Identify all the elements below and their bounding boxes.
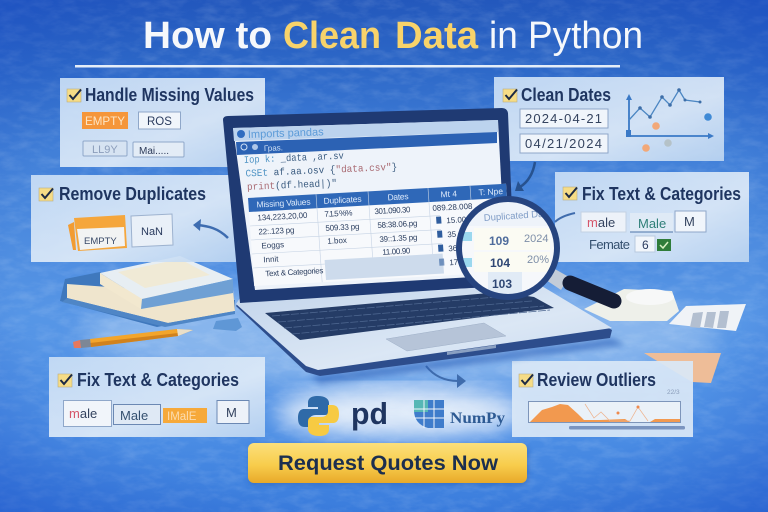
tag: male bbox=[581, 212, 626, 232]
tag: ros: ROS bbox=[147, 116, 172, 128]
toolbar bbox=[236, 132, 497, 155]
code lines: CSEt af.aa.osv {"data.csv"} bbox=[245, 162, 398, 180]
tag: empty: EMPTY bbox=[85, 116, 125, 128]
tag: M: M bbox=[684, 214, 695, 229]
heading: fix text left: Fix Text & Categories bbox=[77, 370, 239, 390]
tag: Male green: Male bbox=[638, 216, 666, 231]
panel: fix text and categories right bbox=[555, 172, 749, 262]
title bbox=[143, 15, 643, 57]
import strip: Imports pandas bbox=[248, 126, 324, 141]
data table bbox=[248, 184, 512, 286]
scale bar bbox=[569, 426, 685, 430]
magnifier handle bbox=[546, 268, 614, 301]
data table: Text & Categories bbox=[265, 266, 324, 278]
data table: T: Npe bbox=[478, 186, 504, 197]
icon: green check bbox=[657, 239, 671, 251]
heading: handle missing values: Handle Missing Values bbox=[85, 85, 254, 105]
data table: 17 bbox=[449, 258, 459, 267]
lens bbox=[462, 202, 554, 294]
logo: numpy icon bbox=[414, 400, 444, 428]
lens: 2024 bbox=[524, 233, 548, 245]
arrow: laptop to outliers bbox=[426, 366, 466, 388]
data table: 22:.123 pg bbox=[258, 226, 295, 237]
tag: 6 bbox=[635, 236, 655, 252]
icon: check bbox=[67, 89, 81, 102]
arrow: fix text to magnifier bbox=[555, 213, 575, 222]
date: us bbox=[520, 134, 608, 153]
keyboard bbox=[265, 292, 554, 340]
heading: review outliers: Review Outliers bbox=[537, 370, 656, 390]
data table: 58:38.06.pg bbox=[377, 219, 418, 230]
data table: Innit bbox=[263, 255, 280, 264]
pencil bbox=[73, 329, 193, 348]
tag: lloy bbox=[83, 141, 127, 156]
data table: 36 bbox=[448, 244, 458, 253]
panel: fix text and categories left bbox=[49, 357, 265, 437]
laptop shadow bbox=[310, 338, 625, 384]
tag: empty bbox=[82, 112, 128, 129]
data table: 15.00 bbox=[446, 215, 467, 225]
heading: fix text right: Fix Text & Categories bbox=[582, 184, 741, 204]
panel: clean dates bbox=[494, 77, 724, 161]
arrow: to remove duplicates bbox=[193, 219, 228, 238]
lens: 109 bbox=[489, 234, 509, 248]
data table: 509.33 pg bbox=[325, 222, 360, 233]
screen bezel bbox=[223, 108, 515, 303]
icon: folder with empty bbox=[68, 215, 127, 251]
title: in Python bbox=[489, 15, 643, 57]
import strip bbox=[233, 120, 498, 141]
tag: Male: Male bbox=[120, 408, 148, 423]
tag: M bbox=[217, 400, 249, 424]
code lines bbox=[244, 148, 398, 194]
text: female: Femate bbox=[589, 237, 630, 252]
icon: check bbox=[563, 187, 577, 200]
data table: 1.box bbox=[327, 236, 347, 246]
title: Data bbox=[395, 15, 479, 57]
data table: 134,223,20,00 bbox=[257, 211, 308, 223]
logo: pandas pd: pd bbox=[351, 396, 388, 431]
date: iso bbox=[520, 109, 608, 128]
data table: Missing Values bbox=[256, 197, 311, 210]
trackpad bbox=[386, 323, 506, 351]
line chart bbox=[626, 88, 714, 152]
laptop front notch bbox=[447, 345, 496, 355]
logo: numpy text: NumPy bbox=[450, 410, 505, 427]
arrow: clean dates to laptop bbox=[515, 162, 535, 191]
desk items bbox=[584, 289, 746, 383]
laptop base bbox=[236, 285, 612, 376]
tag: lloy: LL9Y bbox=[92, 144, 118, 156]
title: Clean bbox=[283, 15, 381, 57]
lens: Duplicated Da bbox=[483, 209, 544, 224]
data table: 7.1.5 %% bbox=[324, 208, 353, 219]
screen bbox=[233, 120, 506, 290]
toolbar: Граs. bbox=[264, 143, 283, 153]
tag: nan bbox=[131, 214, 173, 247]
tag: IMalE orange bbox=[163, 408, 207, 423]
data table: Mt 4 bbox=[440, 189, 458, 199]
tag: male bbox=[64, 400, 112, 426]
data table: 301.090.30 bbox=[374, 205, 411, 216]
icon: check bbox=[519, 374, 533, 387]
date: us: 04/21/2024 bbox=[525, 136, 602, 151]
data table: 089.28.008 bbox=[432, 202, 473, 213]
tag: mai: Mai..... bbox=[139, 146, 169, 157]
button: request quotes now bbox=[248, 443, 528, 485]
heading: remove duplicates: Remove Duplicates bbox=[59, 184, 206, 204]
code lines: print(df.head|)" bbox=[247, 178, 337, 194]
icon: check bbox=[39, 188, 53, 201]
heading: clean dates: Clean Dates bbox=[521, 85, 611, 105]
data table: Dates bbox=[387, 191, 409, 202]
title: How to bbox=[143, 15, 272, 57]
laptop bbox=[223, 108, 625, 384]
eraser bbox=[213, 318, 242, 331]
code lines: Iop k: _data ,ar.sv bbox=[244, 151, 344, 167]
icon: check bbox=[503, 89, 517, 102]
icon: folder with empty: EMPTY bbox=[84, 236, 117, 247]
data table: Duplicates bbox=[323, 194, 362, 206]
date: iso: 2024-04-21 bbox=[525, 111, 602, 126]
data table: 39::1.35 pg bbox=[379, 233, 418, 244]
tag: Male green bbox=[630, 213, 673, 232]
lens: 103 bbox=[492, 277, 512, 291]
tag: IMalE orange: IMalE bbox=[167, 411, 197, 423]
area chart bbox=[528, 402, 680, 422]
tag: male: male bbox=[69, 406, 97, 421]
lens: 104 bbox=[490, 256, 510, 270]
tag: 6: 6 bbox=[642, 238, 649, 252]
tag: mai bbox=[133, 142, 184, 157]
panel: remove duplicates bbox=[31, 175, 236, 262]
data table: Eoggs bbox=[261, 240, 284, 250]
text: small value: 22/3 bbox=[667, 389, 680, 396]
tag: M: M bbox=[226, 405, 237, 420]
tag: Male bbox=[114, 404, 160, 424]
tag: male: male bbox=[587, 215, 615, 230]
lens ring bbox=[459, 199, 557, 297]
books bbox=[60, 256, 235, 327]
panel: review outliers bbox=[512, 361, 693, 437]
data table: 11.00.90 bbox=[382, 246, 411, 257]
tag: M bbox=[675, 211, 706, 232]
panel: handle missing values bbox=[60, 78, 265, 167]
tag: nan: NaN bbox=[141, 226, 163, 238]
icon: check bbox=[58, 374, 72, 387]
logo: python bbox=[298, 396, 339, 436]
data table: 35 bbox=[447, 230, 457, 239]
lens: 20% bbox=[527, 254, 549, 266]
magnifying glass bbox=[458, 196, 614, 301]
tag: ros bbox=[138, 112, 180, 129]
button: request quotes now: Request Quotes Now bbox=[278, 452, 499, 475]
